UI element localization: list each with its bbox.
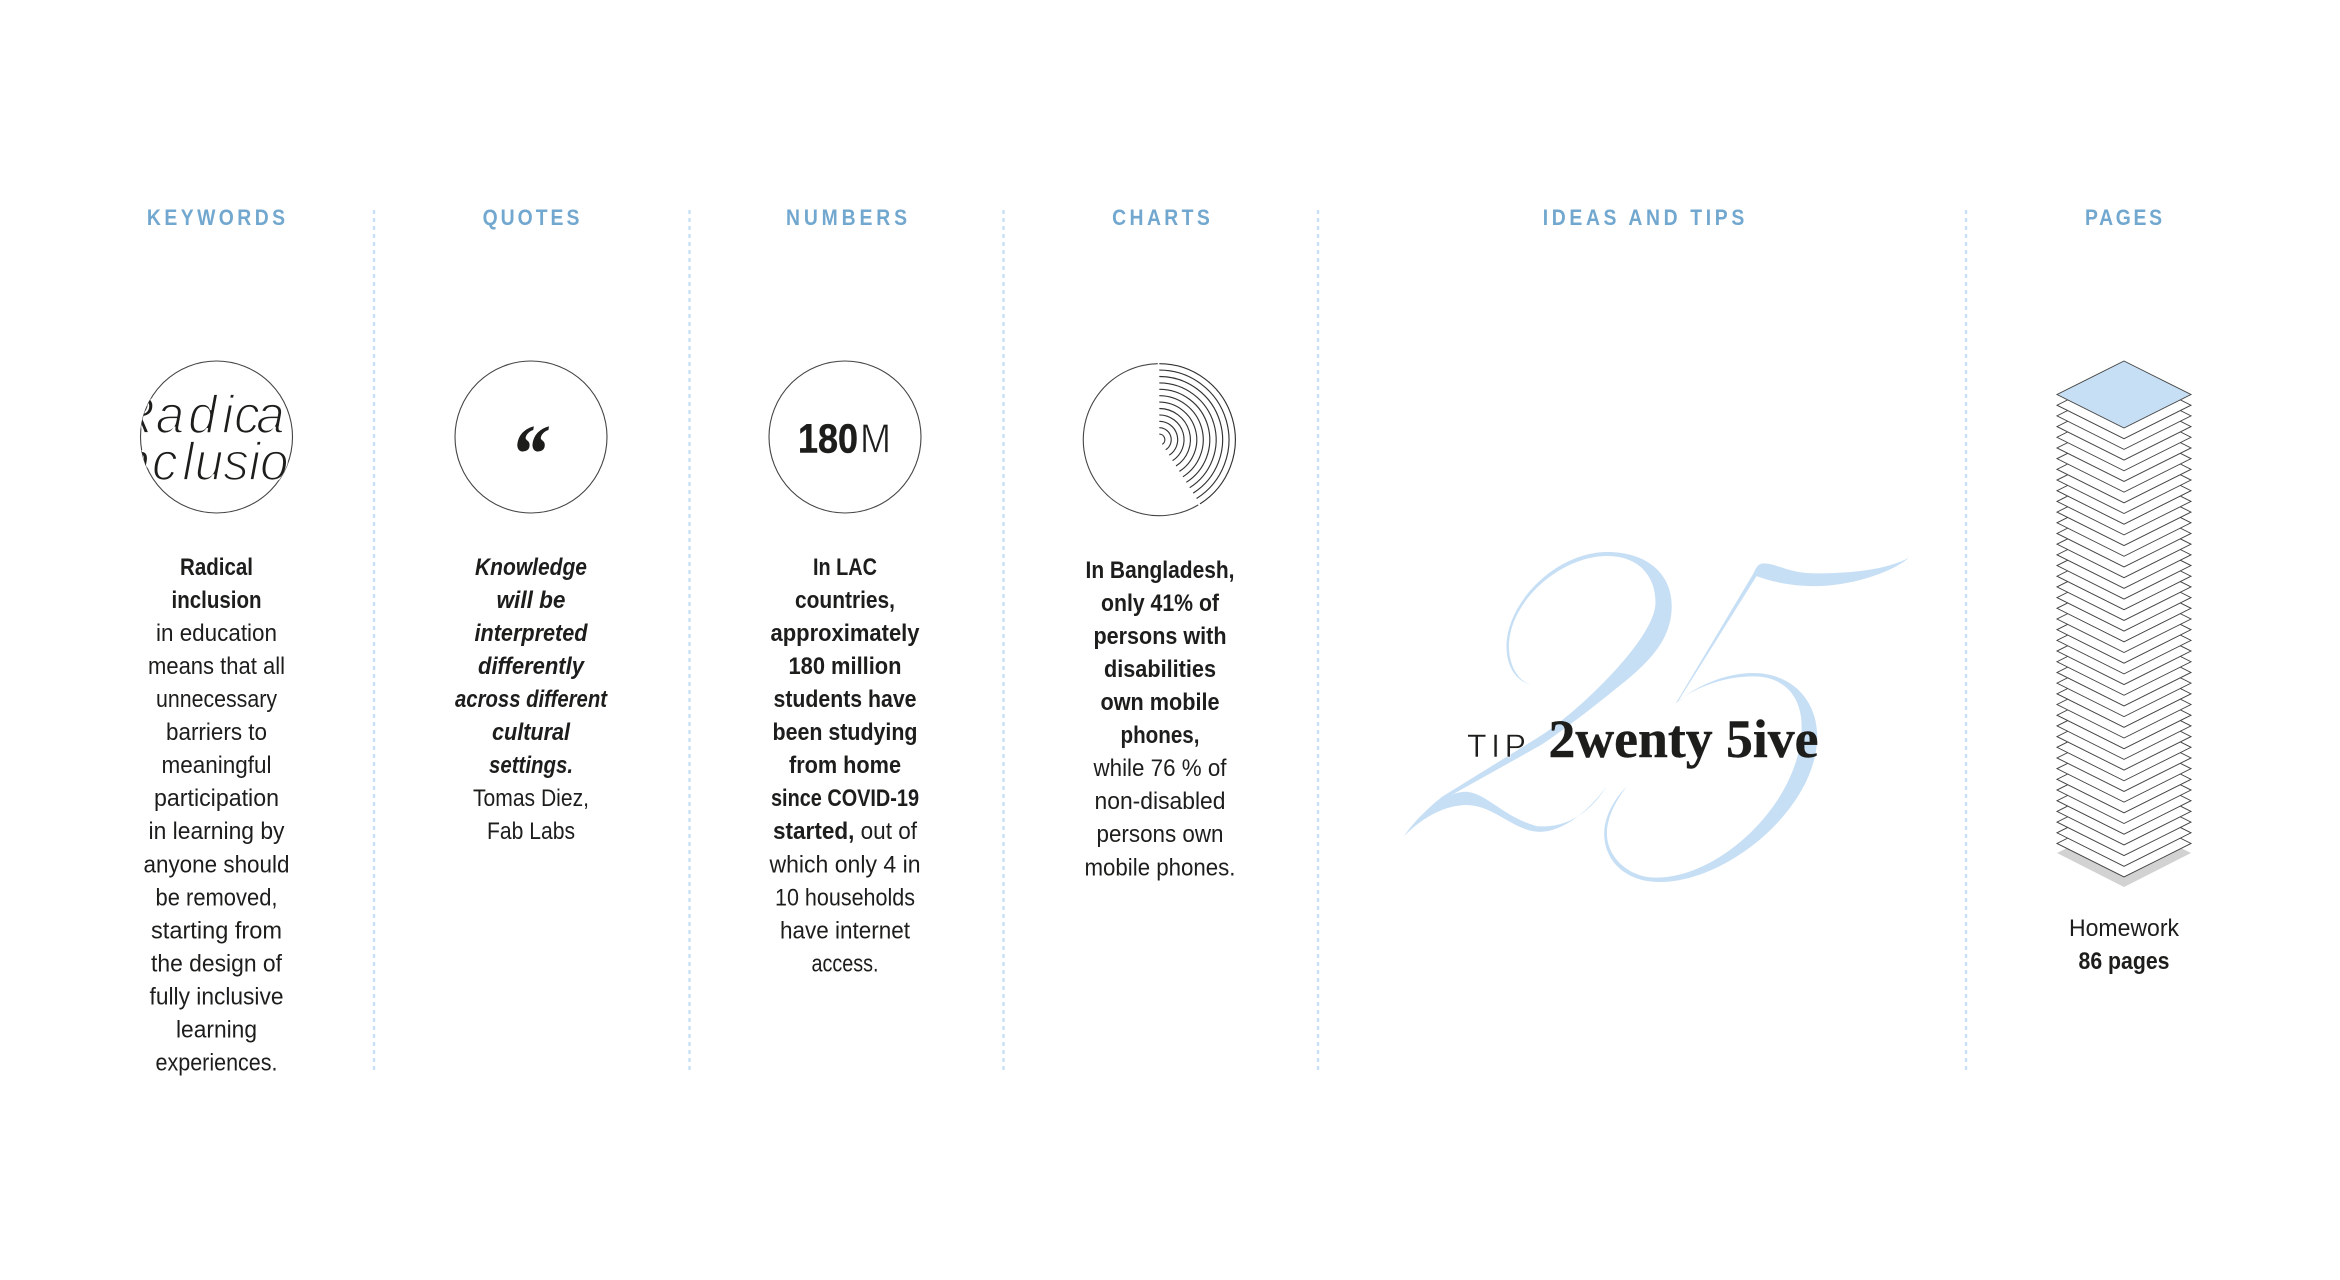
text block: keywords: the design of	[151, 950, 282, 977]
text block: charts: In Bangladesh,	[1086, 557, 1234, 584]
title: tip 2wenty 5ive: 2wenty 5ive	[1548, 709, 1818, 769]
text block: numbers: approximately	[770, 620, 920, 647]
text block: keywords	[144, 554, 290, 1076]
text block: numbers: 180 million	[788, 653, 902, 680]
text block: keywords: experiences.	[156, 1050, 278, 1076]
icon: radical inclusion circle	[140, 360, 294, 514]
text block: numbers: started, out of	[773, 818, 917, 845]
text block: numbers: have internet	[780, 917, 910, 944]
text block: charts: mobile phones.	[1084, 854, 1236, 881]
text block: numbers: students have	[774, 686, 916, 713]
text block: charts: disabilities	[1104, 656, 1216, 683]
text block: quote: Fab Labs	[487, 818, 575, 845]
heading: keywords: KEYWORDS	[147, 206, 285, 230]
text block: quote	[455, 554, 608, 845]
text block: numbers: since COVID-19	[771, 785, 919, 812]
icon: radical inclusion circle: Radical	[118, 385, 309, 445]
chart: 41 percent radial arcs	[1083, 364, 1235, 516]
text block: homework pages: Homework	[2069, 915, 2180, 942]
text block: quote: differently	[478, 653, 586, 680]
text block: keywords: participation	[154, 785, 279, 812]
text block: homework pages: 86 pages	[2078, 948, 2170, 975]
text block: charts: non-disabled	[1094, 788, 1226, 815]
text block: keywords: starting from	[151, 917, 282, 944]
icon: radical inclusion circle: Inclusion	[107, 432, 323, 492]
text block: charts: own mobile	[1100, 689, 1220, 716]
text block: numbers: been studying	[772, 719, 918, 746]
text block: charts: persons own	[1096, 821, 1224, 848]
text block: quote: interpreted	[474, 620, 589, 647]
text block: keywords: learning	[176, 1016, 257, 1043]
text block: quote: across different	[455, 686, 608, 713]
icon: quotation mark circle: “	[502, 408, 552, 501]
text block: charts	[1084, 557, 1236, 881]
text block: homework pages	[2069, 915, 2180, 975]
text block: keywords: in learning by	[148, 818, 284, 845]
text block: numbers: countries,	[795, 587, 895, 614]
text block: quote: Tomas Diez,	[473, 785, 589, 812]
heading: numbers: NUMBERS	[786, 206, 907, 230]
text block: keywords: fully inclusive	[150, 983, 284, 1010]
text block: quote: cultural	[492, 719, 571, 746]
text block: keywords: barriers to	[166, 719, 267, 746]
text block: keywords: meaningful	[162, 752, 272, 779]
text block: charts: phones,	[1120, 722, 1200, 749]
text block: keywords: Radical	[180, 554, 253, 581]
text block: numbers: access.	[812, 950, 878, 977]
heading: charts: CHARTS	[1112, 206, 1210, 230]
decorative numeral: 25	[1404, 552, 1909, 882]
text block: quote: settings.	[489, 752, 573, 779]
text block: charts: only 41% of	[1101, 590, 1220, 617]
text block: keywords: anyone should	[144, 851, 290, 878]
text block: charts: persons with	[1094, 623, 1226, 650]
text block: numbers: In LAC	[813, 554, 877, 581]
text block: keywords: inclusion	[172, 587, 262, 614]
text block: quote: Knowledge	[475, 554, 587, 581]
text block: numbers: 10 households	[775, 884, 915, 911]
heading: pages: PAGES	[2085, 206, 2162, 230]
icon: stack of pages	[2057, 361, 2191, 887]
text block: numbers	[769, 554, 920, 977]
icon: 180M circle	[769, 361, 921, 513]
heading: quotes: QUOTES	[483, 206, 580, 230]
icon: quotation mark circle	[455, 361, 607, 513]
text block: numbers: which only 4 in	[769, 851, 920, 878]
text block: keywords: be removed,	[156, 884, 278, 911]
text block: keywords: in education	[156, 620, 277, 647]
text block: charts: while 76 % of	[1093, 755, 1227, 782]
icon: 180M circle: M	[860, 416, 891, 462]
icon: 180M circle: 180	[798, 416, 858, 462]
heading: ideas and tips: IDEAS AND TIPS	[1543, 206, 1744, 230]
text block: keywords: means that all	[148, 653, 285, 680]
title: tip 2wenty 5ive: TIP	[1467, 728, 1526, 764]
text block: numbers: from home	[789, 752, 901, 779]
text block: quote: will be	[496, 587, 566, 614]
text block: keywords: unnecessary	[156, 686, 277, 713]
